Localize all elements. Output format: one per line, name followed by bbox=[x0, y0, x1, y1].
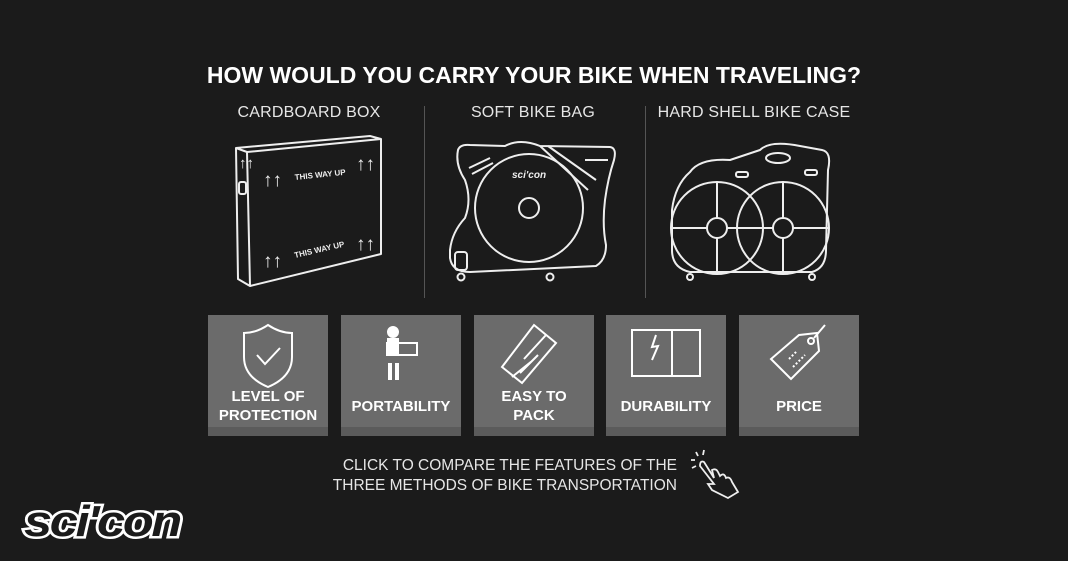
tile: easy to pack: EASY TO bbox=[501, 388, 567, 405]
tile: level of protection: LEVEL OF bbox=[231, 388, 305, 405]
call to action text bbox=[333, 457, 677, 494]
illustrations bbox=[235, 135, 830, 287]
label: hard shell: HARD SHELL BIKE CASE bbox=[658, 104, 850, 121]
tile: easy to pack: PACK bbox=[513, 407, 555, 424]
icon: soft bag bbox=[450, 142, 615, 280]
icon: cardboard box: ↑↑ bbox=[239, 155, 254, 172]
icon: cardboard box: ↑↑ bbox=[263, 251, 282, 272]
icon: cardboard box: ↑↑ bbox=[263, 170, 282, 191]
tile: portability bbox=[341, 315, 461, 436]
icon: cardboard box: ↑↑ bbox=[356, 154, 375, 175]
icon: hard case bbox=[671, 144, 829, 280]
tile: level of protection: PROTECTION bbox=[219, 407, 317, 424]
label: cardboard box: CARDBOARD BOX bbox=[237, 104, 381, 121]
tile: level of protection bbox=[208, 315, 328, 436]
label: soft bike bag: SOFT BIKE BAG bbox=[471, 104, 595, 121]
call to action text: CLICK TO COMPARE THE FEATURES OF THE bbox=[343, 457, 677, 474]
icon: cardboard box: ↑↑ bbox=[356, 234, 375, 255]
icon: pointing hand bbox=[691, 450, 740, 499]
tile: portability: PORTABILITY bbox=[352, 398, 450, 415]
tile: durability bbox=[606, 315, 726, 436]
icon: cardboard box bbox=[236, 136, 381, 286]
icon: cardboard box: THIS WAY UP bbox=[294, 168, 347, 182]
tile: price bbox=[739, 315, 859, 436]
tile: easy to pack bbox=[474, 315, 594, 436]
icon: soft bag: sci'con bbox=[512, 170, 546, 181]
tile: durability: DURABILITY bbox=[621, 398, 711, 415]
title: HOW WOULD YOU CARRY YOUR BIKE WHEN TRAVELING? bbox=[207, 62, 861, 88]
call to action text: THREE METHODS OF BIKE TRANSPORTATION bbox=[333, 477, 677, 494]
tile: price: PRICE bbox=[776, 398, 822, 415]
logo: sci'con bbox=[24, 497, 181, 546]
icon: cardboard box: THIS WAY UP bbox=[293, 240, 346, 260]
